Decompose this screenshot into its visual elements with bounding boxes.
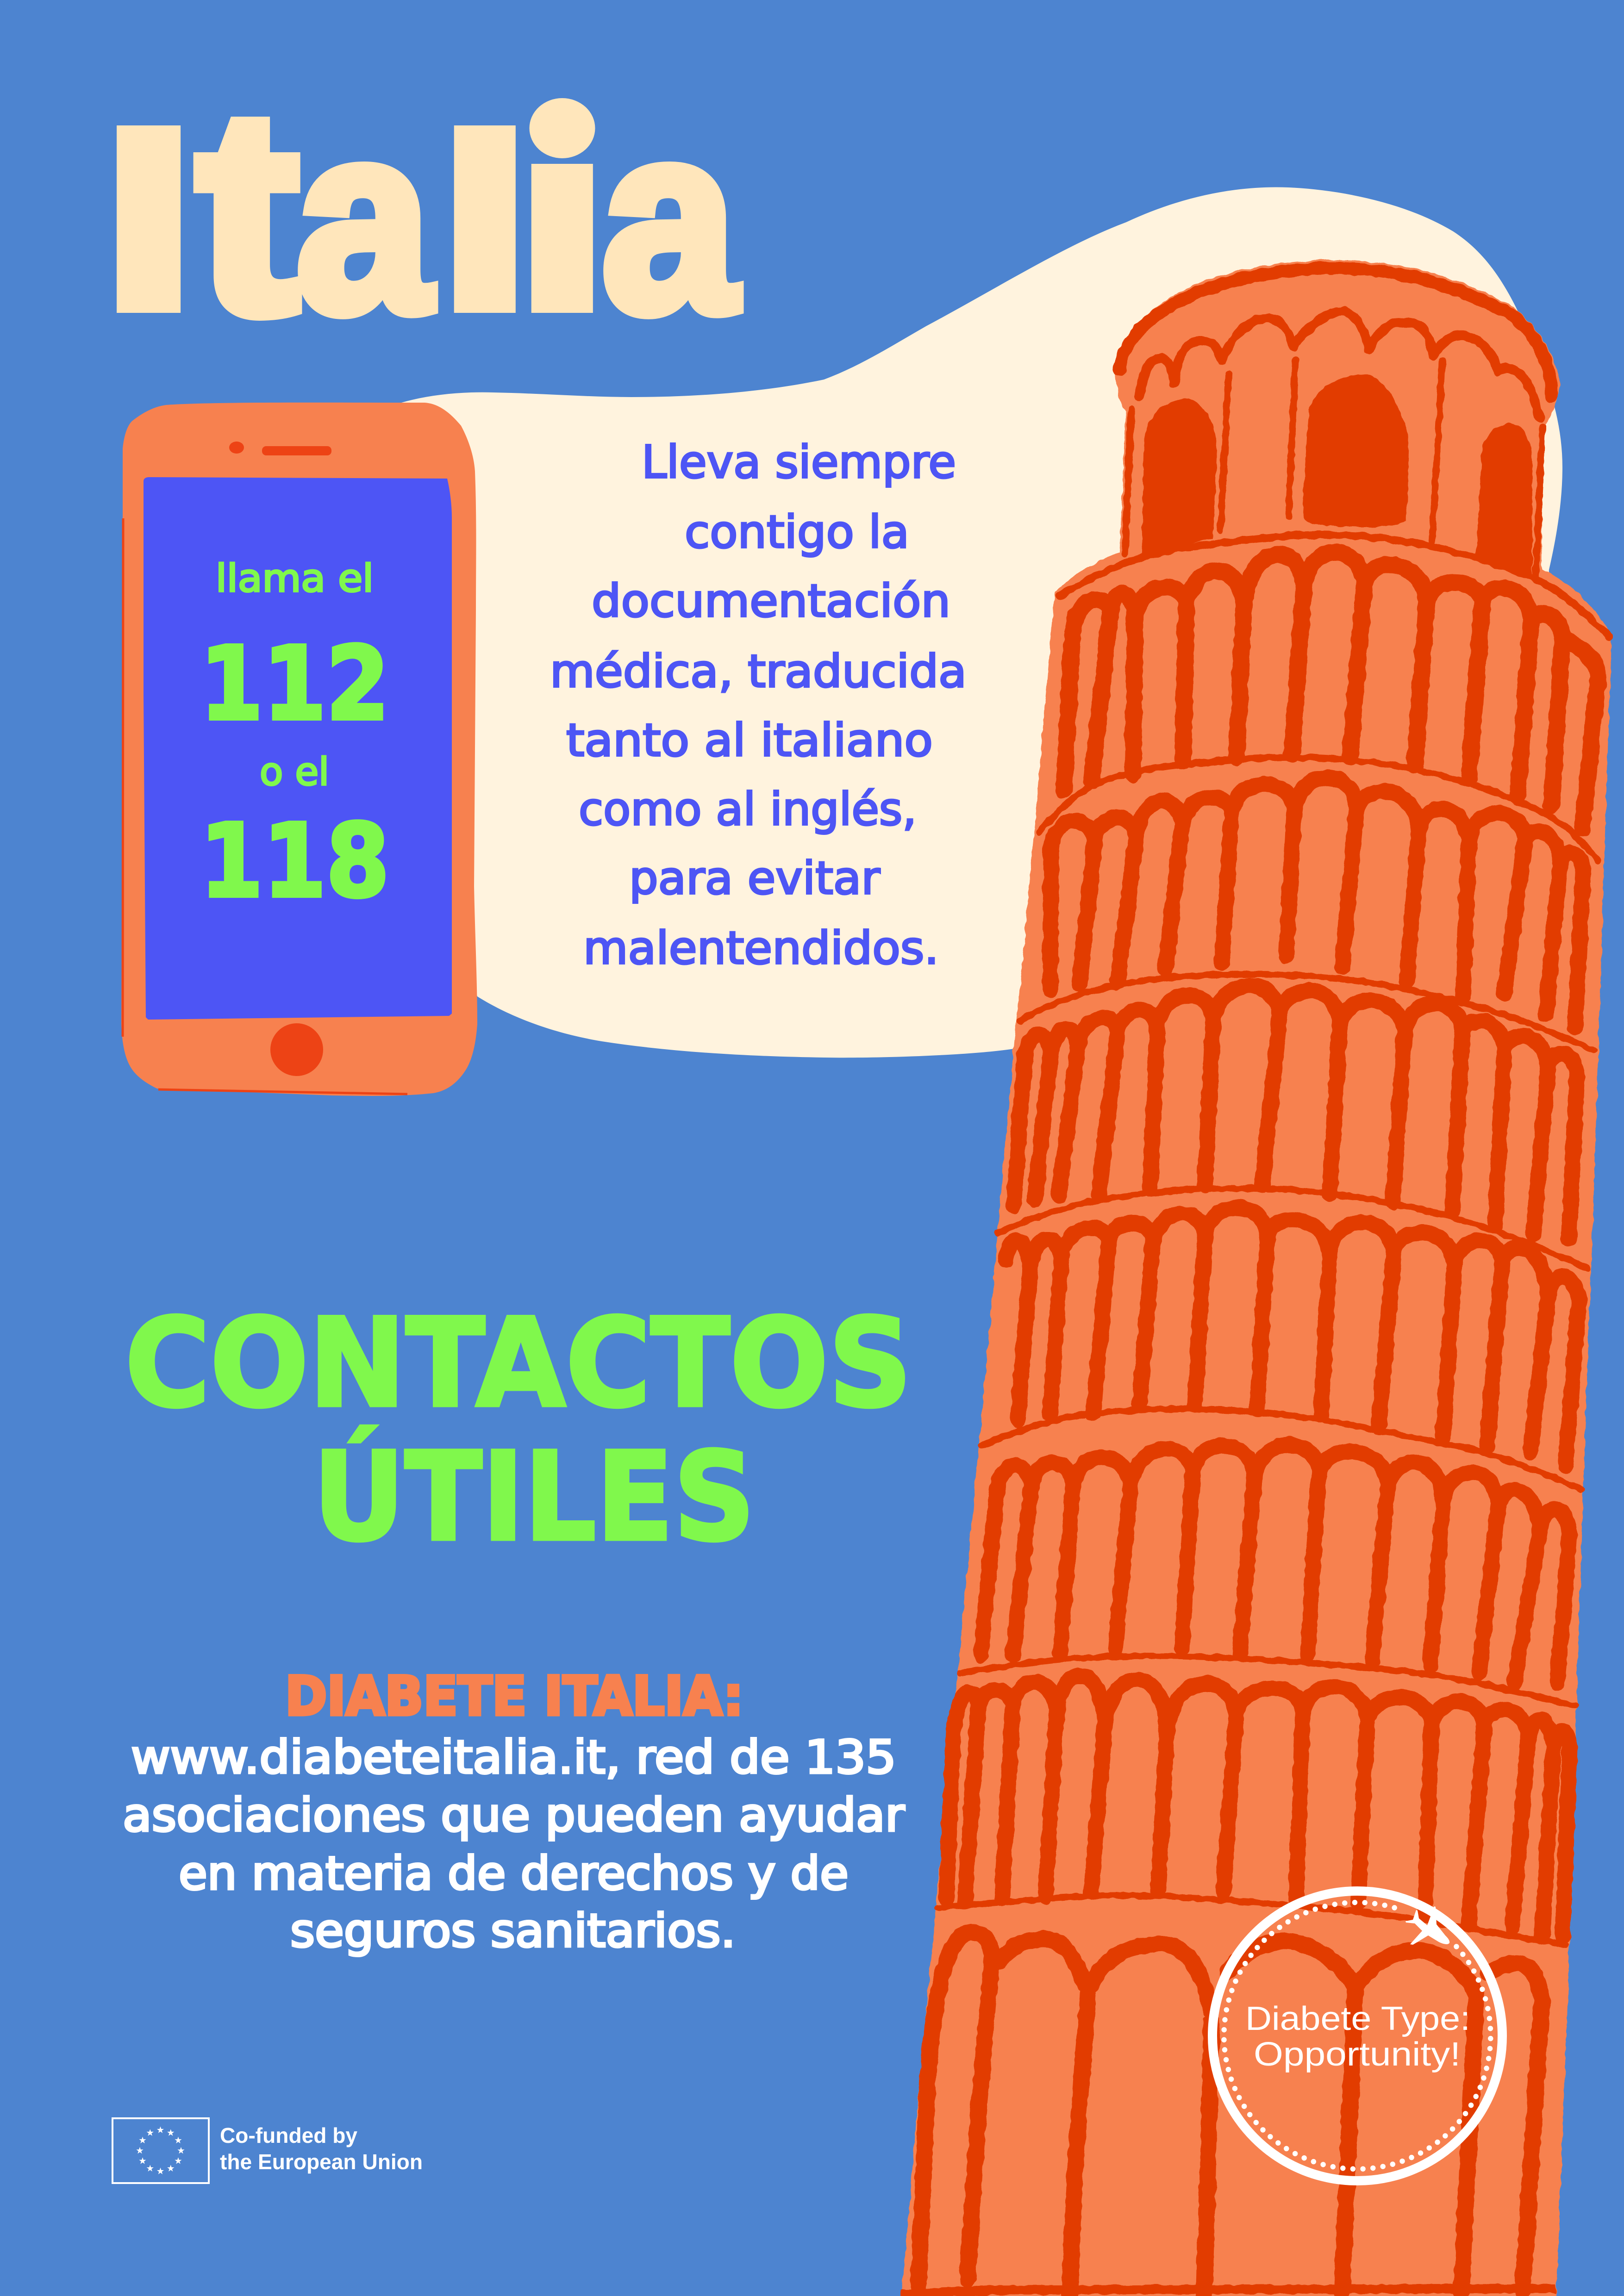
tower top silhouette <box>1024 260 1612 934</box>
emergency numbers: 118 <box>200 803 389 920</box>
phone camera and speaker <box>229 442 331 455</box>
body text: medical documentation advice: malentendidos. <box>583 922 939 974</box>
title: l <box>423 79 548 368</box>
badge text <box>1245 2000 1470 2073</box>
EU text: the European Union <box>220 2150 423 2174</box>
badge text: Opportunity! <box>1254 2036 1461 2073</box>
phone body <box>121 403 477 1096</box>
roof rim <box>1119 268 1551 396</box>
title: t <box>197 52 298 372</box>
contact block: diabete italia: seguros sanitarios. <box>290 1904 736 1958</box>
title <box>117 98 743 321</box>
contact block: diabete italia: en materia de derechos y de <box>179 1847 849 1900</box>
emergency numbers: llama el <box>216 557 374 601</box>
badge ring <box>1212 1891 1502 2181</box>
belfry and roof <box>1119 268 1551 576</box>
badge text: Diabete Type: <box>1245 2000 1470 2037</box>
tower body silhouette <box>901 926 1602 2296</box>
tier 7 large arches right <box>1227 1941 1542 2291</box>
title: i <box>500 57 625 373</box>
EU text <box>220 2123 423 2174</box>
emergency numbers: o el <box>260 750 329 794</box>
belfry arches <box>1140 311 1540 418</box>
EU co-funding logo <box>112 2118 423 2183</box>
tier 6 colonnade <box>946 1675 1570 1935</box>
project badge <box>1212 1891 1502 2181</box>
body text: medical documentation advice: tanto al italiano <box>566 714 933 766</box>
contact block: diabete italia: www.diabeteitalia.it, red de 135 <box>131 1731 896 1784</box>
emergency numbers <box>200 557 389 920</box>
body text: medical documentation advice: para evitar <box>629 852 880 904</box>
contact block: diabete italia <box>123 1665 905 1958</box>
phone screen <box>144 477 452 1020</box>
body text: medical documentation advice: Lleva siempre <box>642 436 956 488</box>
tier 2 colonnade <box>1050 778 1583 1027</box>
phone illustration <box>121 403 477 1096</box>
badge dotted flight path <box>1224 1903 1491 2169</box>
contact block: diabete italia: asociaciones que pueden ayudar <box>123 1789 905 1842</box>
tier 4 colonnade <box>1006 1208 1579 1466</box>
belfry windows <box>1142 374 1532 576</box>
contact block: diabete italia: DIABETE ITALIA: <box>285 1665 743 1728</box>
body text: medical documentation advice <box>550 436 967 974</box>
heading: contactos utiles: CONTACTOS <box>125 1293 912 1435</box>
title: a <box>602 71 737 366</box>
phone edge shading <box>123 518 407 1094</box>
heading: contactos utiles <box>125 1293 912 1568</box>
body text: medical documentation advice: documentación <box>592 575 950 627</box>
EU flag outline with stars <box>112 2118 209 2183</box>
body text: medical documentation advice: contigo la <box>685 506 909 558</box>
tier 3 colonnade <box>1014 986 1577 1239</box>
title: I <box>87 67 210 371</box>
title: a <box>297 71 432 366</box>
emergency numbers: 112 <box>200 626 389 743</box>
phone home button <box>270 1023 323 1076</box>
tier 7 large arches left <box>918 1932 1212 2296</box>
belfry pilasters <box>1125 361 1543 576</box>
tier bands <box>901 535 1609 2295</box>
icon: airplane <box>1405 1906 1449 1945</box>
cream wave panel behind text <box>370 187 1562 1064</box>
EU text: Co-funded by <box>220 2123 357 2147</box>
tier 5 colonnade <box>981 1445 1570 1682</box>
body text: medical documentation advice: médica, traducida <box>550 645 967 697</box>
tier 1 colonnade <box>1064 552 1598 828</box>
body text: medical documentation advice: como al inglés, <box>579 783 917 835</box>
leaning tower of Pisa <box>901 260 1612 2296</box>
heading: contactos utiles: ÚTILES <box>313 1425 755 1568</box>
